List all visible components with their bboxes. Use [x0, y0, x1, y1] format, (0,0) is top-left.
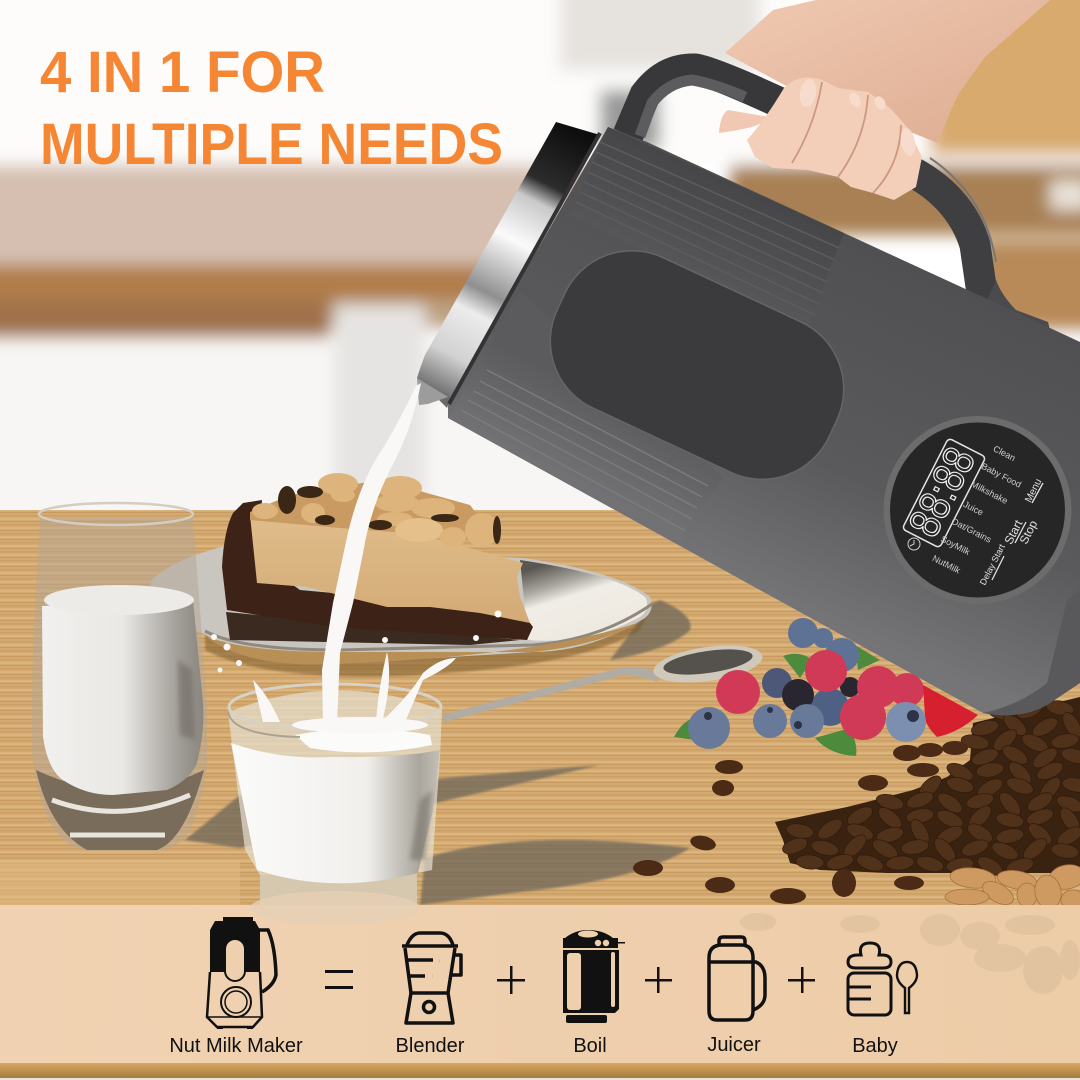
milk pour stream and splash	[211, 383, 502, 733]
plate	[150, 546, 653, 676]
icon labels	[169, 1034, 898, 1057]
blurred kitchen background	[0, 0, 1080, 523]
handle foot	[985, 280, 1050, 330]
icon: blender	[402, 933, 461, 1023]
icon: boil	[563, 930, 625, 1023]
thumb behind handle	[719, 110, 775, 133]
cheesecake slice	[222, 473, 533, 640]
base ring	[983, 590, 1080, 715]
fingers gripping handle	[747, 77, 922, 200]
short glass of milk	[228, 684, 442, 905]
blender kettle	[417, 122, 1080, 715]
kettle body shell	[448, 127, 1080, 715]
program labels: Baby Food	[980, 461, 1023, 490]
headline: 4 IN 1 FOR	[40, 40, 325, 105]
headline: MULTIPLE NEEDS	[40, 112, 503, 177]
table shadows	[185, 600, 691, 905]
digital display: 88:88	[898, 439, 985, 544]
touch buttons: Delay Start	[978, 542, 1007, 587]
wooden table	[0, 510, 1080, 910]
headline	[40, 40, 503, 177]
dark oval window	[526, 226, 868, 504]
plus sign 1	[497, 966, 525, 994]
program labels: Juice	[962, 499, 985, 518]
icon labels: Nut Milk Maker	[169, 1035, 303, 1057]
plus sign 3	[788, 967, 815, 993]
program labels: Milkshake	[969, 479, 1009, 506]
kettle handle	[628, 69, 996, 300]
bottom banner	[0, 891, 1080, 1080]
clock icon	[908, 538, 920, 550]
equals sign	[325, 970, 353, 989]
coffee bean pile	[775, 697, 1080, 879]
icon labels: Juicer	[707, 1034, 761, 1056]
touch buttons	[978, 477, 1044, 587]
back of hand	[725, 0, 1050, 143]
spoon	[442, 640, 765, 722]
collar seam	[449, 133, 600, 404]
icon labels: Boil	[573, 1035, 607, 1057]
upper rib band	[570, 127, 844, 325]
program labels: NutMilk	[931, 553, 962, 576]
control panel	[884, 416, 1072, 604]
icon labels: Blender	[396, 1035, 465, 1057]
scattered coffee beans	[633, 741, 968, 904]
touch buttons: Menu	[1023, 477, 1044, 505]
almonds on table	[945, 862, 1080, 911]
plus sign 2	[645, 967, 672, 993]
program labels	[931, 444, 1023, 576]
icon labels: Baby	[852, 1035, 898, 1057]
icon: nut milk maker	[207, 917, 276, 1029]
touch buttons: Start	[1001, 517, 1026, 547]
icon: juicer	[709, 937, 765, 1020]
program labels: Clean	[992, 444, 1017, 463]
icon: baby bottle and spoon	[848, 943, 917, 1015]
program labels: SoyMilk	[939, 534, 972, 557]
lower rib band	[448, 292, 723, 543]
touch buttons: Stop	[1017, 518, 1040, 546]
berries and mint	[674, 618, 978, 756]
program labels: Oat/Grains	[950, 516, 993, 545]
steel collar	[417, 122, 600, 408]
tall glass of milk	[32, 503, 207, 851]
pour spout	[417, 378, 448, 405]
